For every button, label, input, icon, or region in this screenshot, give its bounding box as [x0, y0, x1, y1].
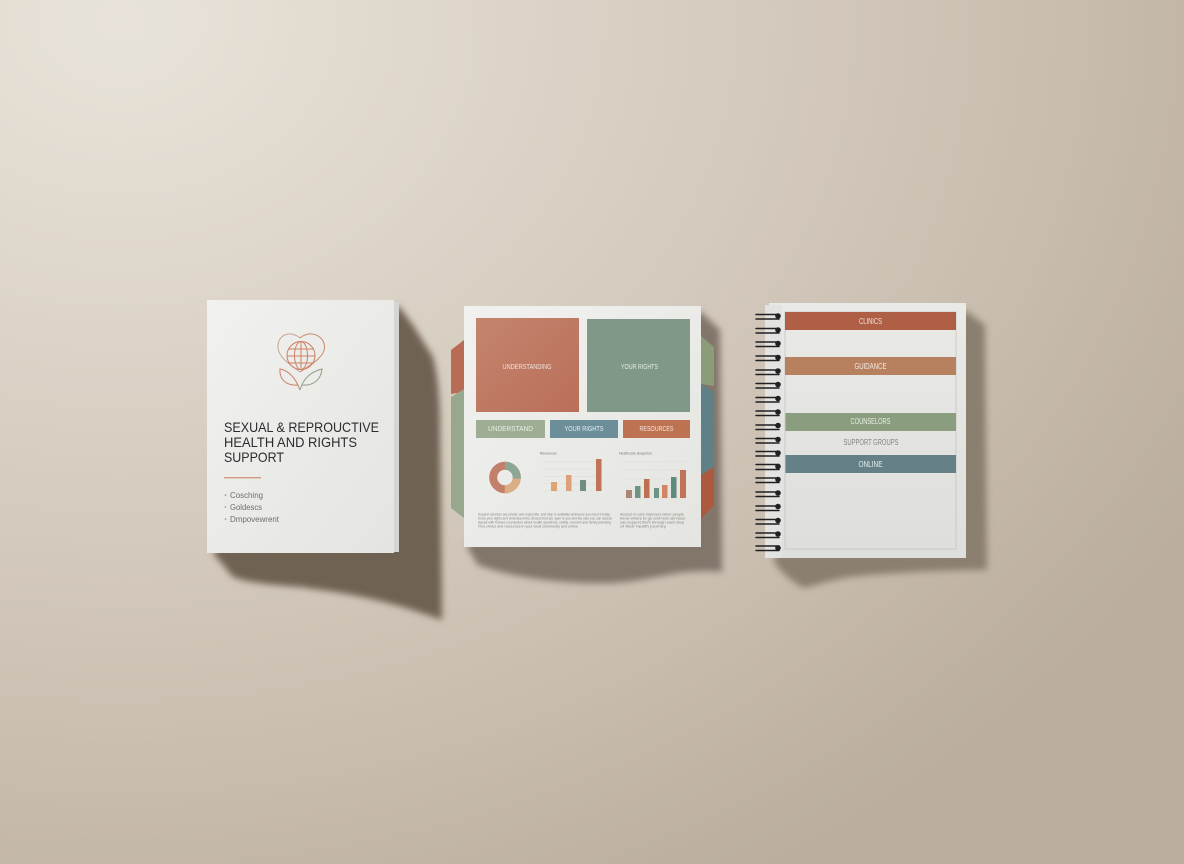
band: clinics — [785, 312, 956, 330]
band: guidance: GUIDANCE — [854, 362, 886, 371]
bar chart: right: Healthcare Snapshot — [619, 452, 652, 456]
band: clinics: CLINICS — [859, 317, 882, 326]
body text: right: Access to care improves when people — [620, 512, 684, 516]
body text: right: of their health journey — [620, 524, 666, 528]
small tab: resources — [623, 420, 690, 438]
bullet list: Cosching — [230, 490, 263, 500]
divider rule — [224, 477, 261, 478]
band: guidance — [785, 357, 956, 375]
body text: left — [478, 512, 612, 528]
title: SUPPORT — [224, 449, 284, 465]
bar chart: left — [540, 452, 602, 491]
body text: left: Speak with trained counsellors about health questions, safety, consent and family planning — [478, 520, 611, 524]
small tab: understand — [476, 420, 545, 438]
inner page frame — [785, 312, 956, 549]
bullet list — [225, 490, 280, 524]
title — [224, 419, 379, 465]
booklet cover — [207, 300, 442, 620]
tile: your rights — [587, 319, 690, 412]
band: online: ONLINE — [858, 460, 882, 469]
bar chart: right — [619, 452, 687, 498]
band: counselors: COUNSELORS — [850, 417, 890, 426]
donut chart — [493, 466, 517, 489]
bullet list: Dmpovewrent — [230, 514, 280, 524]
body text: left: Find clinics and resources in your local community and online — [478, 524, 578, 528]
tile: your rights: YOUR RIGHTS — [621, 364, 658, 371]
bullet list: Goldescs — [230, 502, 262, 512]
report booklet — [451, 306, 722, 583]
bar chart: left: Resources — [540, 452, 557, 456]
small tab: your rights — [550, 420, 618, 438]
left tabs — [451, 340, 464, 518]
body text: right: can support them through each step — [620, 520, 684, 524]
body text: right — [620, 512, 685, 528]
body text: right: know where to go and how services — [620, 516, 685, 520]
spiral notebook — [756, 303, 987, 588]
right tabs — [701, 336, 714, 519]
title: SEXUAL & REPROUCTIVE — [224, 419, 379, 435]
icon: heart, globe and leaves — [278, 334, 325, 390]
body text: left: Know your rights and understand the choices that are open to you and the care you can access — [478, 516, 612, 520]
band: online — [786, 455, 956, 473]
body text: left: Support services are private and respectful, and help is available whenever you need it today — [478, 512, 610, 516]
small tab: resources: RESOURCES — [640, 426, 674, 433]
tile: understanding — [476, 318, 579, 412]
spiral binding — [756, 313, 781, 551]
tile: understanding: UNDERSTANDING — [502, 364, 552, 371]
small tab: understand: UNDERSTAND — [488, 426, 533, 433]
band: counselors — [786, 413, 956, 431]
title: HEALTH AND RIGHTS — [224, 434, 357, 450]
small tab: your rights: YOUR RIGHTS — [564, 426, 604, 433]
label: support groups: SUPPORT GROUPS — [844, 438, 898, 447]
